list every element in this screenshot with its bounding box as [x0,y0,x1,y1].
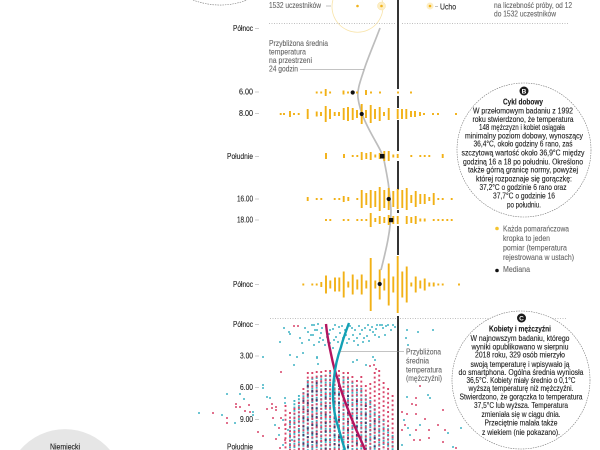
annotation: approximate mean over 24 hours: na przestrzeni [269,56,312,65]
text: women and men body: wyniki opublikowano w sierpniu [471,342,568,352]
icon: circle with mouth and ear measurement dots [326,0,386,32]
chart: women and men scatter [199,323,461,450]
red columns [286,370,393,450]
text: circadian cycle body [462,106,584,209]
strip: measurements at 8.00 [281,104,456,124]
strip: measurements at midnight [303,256,459,313]
axis labels: daily cycle hours: Północ [233,279,254,289]
axis labels: daily cycle hours: 6.00 [239,86,253,96]
text: circadian cycle body: 37,7°C o godzinie 16 [493,191,555,200]
text: circadian cycle body: W przełomowym badaniu z 1992 [473,106,573,116]
text: circadian cycle body: 36,4°C, około godziny 6 rano, zaś [474,140,572,149]
text: circadian cycle body: po południu. [507,200,541,209]
scattered teal dots [199,324,461,447]
curve: women mean [326,324,365,450]
axis labels: daily cycle hours [227,23,259,289]
scattered red dots [213,326,456,448]
legend: orange dot and median: Mediana [503,265,530,274]
strip: measurements at 16.00 [308,187,452,211]
text: circadian cycle body: także górną granicę normy, powyżej [468,166,578,175]
text: circadian cycle body: 148 mężczyzn i kobiet osiągała [479,123,565,132]
axis labels: daily cycle hours: 16.00 [237,194,253,204]
text: women and men body [458,334,584,437]
text: women and men body: z wiekiem (nie pokazano). [482,428,560,437]
legend: orange dot and median: rejestrowana w ustach) [503,253,574,262]
axis labels: daily cycle hours: Północ [233,23,254,33]
text: women and men body: 37,5°C lub wyższa. Temperatura [474,401,568,410]
strip: measurements at 18.00 [326,213,452,227]
strip: measurements at noon [326,151,443,161]
text: women and men body: wyższą temperaturę niż mężczyźni. [468,384,574,393]
text: circadian cycle body: minimalny poziom dobowy, wynoszący [465,132,583,141]
axis labels: women and men hours: 3.00 [240,350,253,360]
annotation: approximate mean for men: Przybliżona [406,348,441,356]
central reference line [397,0,399,450]
curve: men mean [333,323,349,450]
text: women and men body: zmieniała się w ciągu dnia. [482,410,560,419]
text: women and men body: 36,5°C. Kobiety miały średnio o 0,1°C [466,376,576,385]
dark overlap columns [303,382,375,450]
annotation: approximate mean over 24 hours: 24 godzin [269,64,298,74]
annotation: approximate mean over 24 hours [269,39,364,74]
teal columns [290,372,393,450]
text: sample note right: do 1532 uczestników [494,10,556,18]
legend: orange dot and median: Każda pomarańczowa [503,224,569,234]
panel: B circadian cycle [457,83,591,217]
axis labels: women and men hours: 6.00 [240,382,253,392]
annotation: approximate mean over 24 hours: Przybliżona średnia [269,39,328,48]
legend: orange dot and median: pomiar (temperatura [503,244,567,252]
annotation: approximate mean for men: średnia [406,356,429,366]
strip: measurements at 6.00 [317,89,411,96]
text: women and men body: swoją temperaturę i wpisywało ją [470,360,570,369]
heading: women and men: Kobiety i mężczyźni [489,324,551,334]
panel: grey circle bottom left [20,429,110,450]
panel: top-left partial circle [193,0,247,5]
annotation: approximate mean for men [340,348,442,383]
annotation: approximate mean over 24 hours: temperatura [269,48,306,56]
text: circadian cycle body: roku stwierdzono, że temperatura [472,115,574,124]
text: circadian cycle body: której rozpoznaje się gorączkę: [476,174,572,183]
text: sample note right: na liczebność próby, od 12 [494,1,572,10]
badge: C: C [519,316,524,322]
legend: ear [426,2,456,12]
text: women and men body: W najnowszym badaniu, którego [470,334,570,343]
text: women and men body: do smartphona. Ogólna średnia wyniosła [458,368,584,377]
text: sample note right [494,1,572,18]
text: women and men body: Przeciętnie malała także [484,418,558,428]
axis labels: daily cycle hours: 8.00 [239,108,253,118]
axis labels: women and men hours [227,319,259,450]
text: circadian cycle body: szczytową wartość około 36,9°C między [462,149,584,158]
axis labels: women and men hours: Północ [233,319,254,329]
heading: circadian cycle: Cykl dobowy [503,98,543,106]
text: circadian cycle body: 37,2°C o godzinie 6 rano oraz [480,183,566,192]
legend: orange dot and median [495,224,574,274]
text: sample note left: 1532 uczestników [269,1,321,10]
annotation: approximate mean for men: temperatura [406,366,442,374]
curve: approximate mean temperature over 24 hours [358,28,391,270]
panel: C women and men [452,311,590,449]
axis labels: women and men hours: 9.00 [240,414,253,424]
legend: ear: Ucho [440,2,456,12]
legend: orange dot and median: kropka to jeden [503,234,550,243]
badge: B: B [522,88,527,96]
axis labels: daily cycle hours: 18.00 [237,214,253,224]
text: women and men body: 2018 roku, 329 osób mierzyło [475,350,565,360]
panel: top measurement fragment [269,0,572,32]
axis labels: daily cycle hours: Południe [227,151,253,161]
annotation: approximate mean for men: (mężczyźni) [406,374,442,383]
